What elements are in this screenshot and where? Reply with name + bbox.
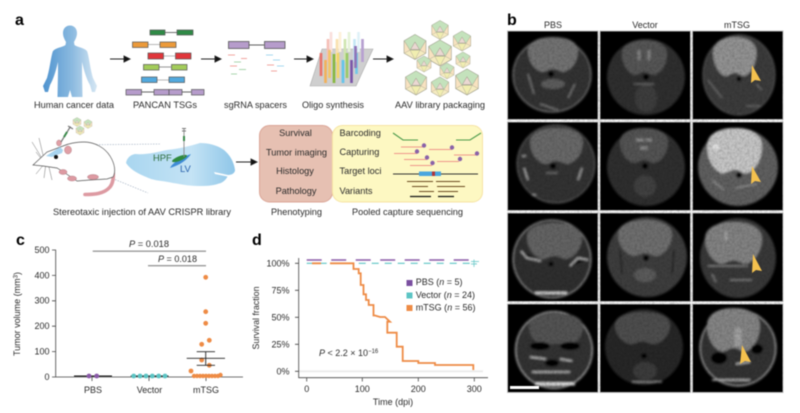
p value: P < 2.2 × 10 — [319, 348, 368, 358]
icon: oligo synthesis array — [310, 32, 373, 86]
panel: b MRI grid — [507, 12, 783, 392]
box: phenotyping — [260, 126, 332, 202]
arrowhead row 3 — [752, 254, 762, 273]
arrow 1 — [110, 56, 130, 62]
PBS points — [74, 374, 112, 378]
caption: pooled capture sequencing: Pooled capture sequencing — [352, 207, 463, 217]
significance bar 2: P = 0.018 — [158, 254, 197, 264]
caption: human cancer data: Human cancer data — [34, 100, 115, 110]
x tick labels: 300 — [467, 384, 482, 394]
x tick labels: PBS — [84, 385, 102, 395]
caption: phenotyping: Phenotyping — [271, 207, 322, 217]
arrowhead row 2 — [751, 166, 761, 184]
y tick labels: 400 — [34, 270, 50, 280]
panel label d: d — [252, 232, 262, 249]
caption: sgRNA spacers: sgRNA spacers — [224, 100, 287, 110]
significance bar 1 — [93, 239, 206, 251]
panel label b: b — [507, 12, 517, 29]
legend: mTSG (n = 56) — [416, 302, 475, 312]
Vector line — [307, 260, 479, 267]
box: pooled capture sequencing: Variants — [340, 186, 373, 196]
arrow 5 — [236, 159, 257, 165]
panel label c: c — [16, 232, 25, 249]
significance bar 2 — [148, 254, 206, 266]
y tick labels: 100 — [34, 346, 50, 356]
arrowhead row 4 — [740, 345, 751, 364]
x tick labels: 100 — [355, 384, 370, 394]
panel label a: a — [15, 12, 24, 29]
legend: PBS (n = 5) — [416, 277, 462, 287]
y tick labels: 100% — [266, 258, 290, 268]
y tick labels: 0 — [44, 372, 50, 382]
x tick labels: Vector — [137, 385, 162, 395]
PBS line — [307, 259, 476, 261]
column heading Vector: Vector — [632, 20, 658, 30]
box: pooled capture sequencing: Capturing — [340, 147, 379, 157]
MRI row 3 — [508, 213, 783, 302]
y tick labels: 25% — [271, 340, 290, 350]
y tick labels: 200 — [34, 321, 50, 331]
y axis label: Tumor volume (mm — [12, 278, 22, 356]
mTSG points — [187, 275, 225, 378]
axes — [52, 250, 243, 381]
arrowhead row 1 — [751, 65, 761, 83]
arrow 3 — [294, 56, 313, 62]
box: phenotyping: Survival — [279, 128, 312, 138]
x tick labels — [304, 384, 482, 394]
caption: oligo synthesis: Oligo synthesis — [302, 100, 364, 110]
box: pooled capture sequencing: Target loci — [340, 166, 381, 176]
y tick labels — [266, 258, 290, 376]
panel: c tumor volume chart — [12, 232, 243, 395]
y axis label: ) — [12, 272, 22, 275]
column heading mTSG: mTSG — [724, 20, 750, 30]
label: HPF: HPF — [153, 152, 172, 163]
panel: a — [15, 12, 485, 217]
zero reference band — [299, 370, 483, 372]
mTSG survival curve — [312, 263, 473, 370]
y axis label: 3 — [14, 274, 20, 278]
box: phenotyping: Tumor imaging — [266, 148, 327, 158]
axes — [295, 258, 488, 382]
illustration: mouse brain — [126, 128, 235, 186]
Vector points — [131, 374, 168, 378]
y tick labels: 500 — [34, 245, 50, 255]
x tick labels: mTSG — [193, 385, 219, 395]
icon: AAV capsids — [404, 20, 478, 97]
MRI grain texture — [508, 32, 783, 392]
legend: Vector (n = 24) — [416, 290, 475, 300]
icon: human silhouette — [43, 26, 97, 97]
label: LV: LV — [180, 163, 192, 174]
box: phenotyping: Histology — [276, 166, 314, 176]
caption: PANCAN TSGs: PANCAN TSGs — [133, 100, 197, 110]
p value: −16 — [368, 349, 379, 355]
MRI row 4 — [508, 304, 783, 392]
dotted zoom lines — [60, 144, 161, 193]
y tick labels — [34, 245, 50, 382]
significance bar 1: P = 0.018 — [129, 239, 169, 249]
illustration: mouse — [32, 126, 115, 194]
caption: stereotaxic injection: Stereotaxic injection of AAV CRISPR library — [53, 207, 231, 217]
x tick labels: 0 — [304, 384, 309, 394]
box: phenotyping: Pathology — [276, 186, 317, 196]
panel: d survival chart — [251, 232, 488, 407]
y tick labels: 50% — [271, 312, 290, 322]
column heading PBS: PBS — [544, 20, 562, 30]
y tick labels: 0% — [276, 366, 290, 376]
gene bars: PANCAN TSGs — [126, 30, 204, 95]
x axis label: Time (dpi) — [373, 397, 413, 407]
legend — [406, 277, 475, 312]
box: pooled capture sequencing: Barcoding — [340, 128, 381, 138]
MRI row 2 — [508, 122, 783, 210]
syringe on mouse — [61, 126, 73, 142]
x tick labels — [84, 385, 219, 395]
MRI row 1 — [508, 31, 783, 120]
icon: AAV particles at injection — [73, 118, 92, 135]
box: pooled capture sequencing — [332, 126, 482, 202]
syringe on brain — [182, 128, 186, 157]
scale bar — [510, 386, 539, 389]
sgRNA spacers — [228, 42, 285, 74]
arrow 4 — [373, 56, 393, 62]
x tick labels: 200 — [411, 384, 426, 394]
y axis label: Survival fraction — [251, 286, 261, 350]
y tick labels: 75% — [271, 286, 290, 296]
arrow 2 — [201, 56, 221, 62]
y tick labels: 300 — [34, 296, 50, 306]
caption: AAV library packaging: AAV library packaging — [395, 100, 485, 110]
